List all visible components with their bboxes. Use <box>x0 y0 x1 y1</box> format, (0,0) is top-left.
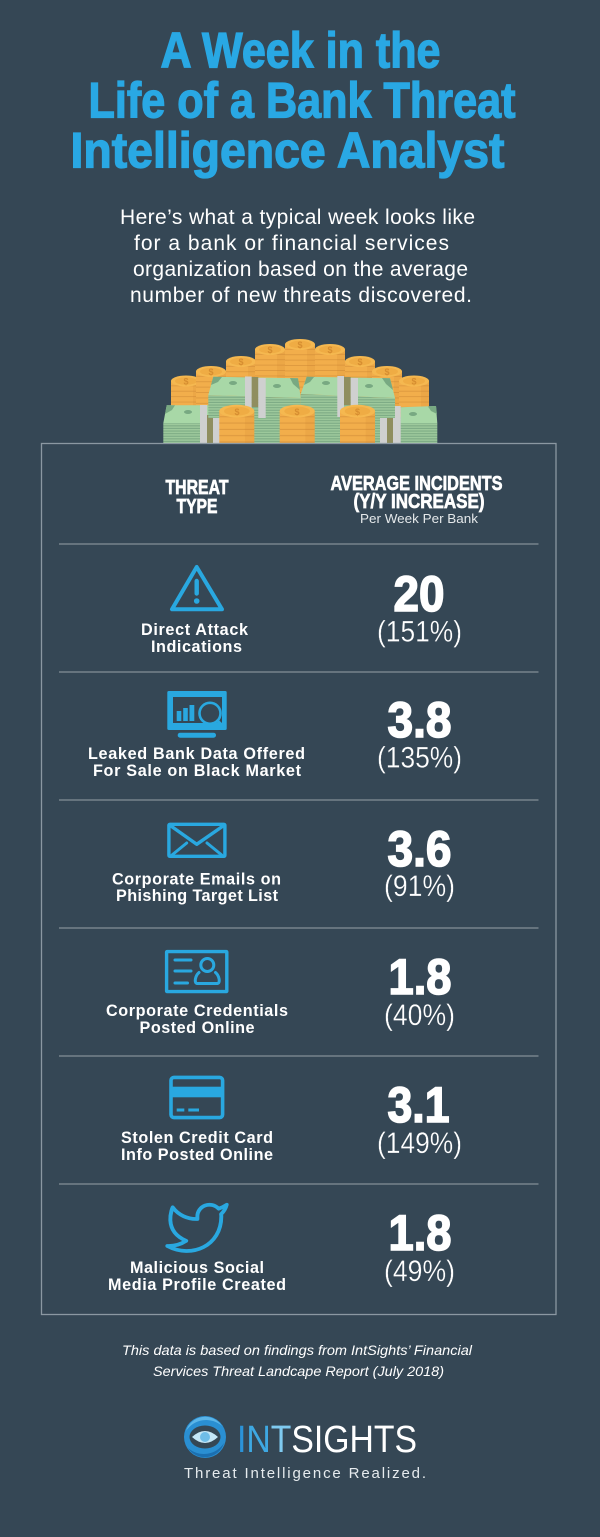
column header: average incidents <box>330 473 502 526</box>
intro text: number of new threats discovered. <box>130 284 472 307</box>
row: direct attack indications <box>141 566 462 656</box>
back row of coin stacks: $ <box>327 345 333 355</box>
icon: credit card <box>170 1077 224 1118</box>
label <box>112 870 281 905</box>
intro text: Here’s what a typical week looks like <box>120 206 475 229</box>
label: Corporate Credentials <box>106 1002 288 1020</box>
label: Phishing Target List <box>116 887 279 905</box>
label: Malicious Social <box>130 1259 264 1277</box>
back row of coin stacks: $ <box>208 367 214 377</box>
value <box>377 692 462 774</box>
illustration: stacks of coins and money <box>163 339 438 443</box>
back row of coin stacks: $ <box>267 345 273 355</box>
column header: threat type: THREAT <box>166 477 228 499</box>
value: (151%) <box>377 616 462 649</box>
label <box>141 621 249 656</box>
title: A Week in the <box>160 23 440 79</box>
column header: average incidents: Per Week Per Bank <box>360 511 479 526</box>
row: leaked bank data <box>88 691 462 780</box>
logo <box>184 1416 426 1482</box>
icon: monitor with magnifier <box>167 691 227 738</box>
intro text: for a bank or financial services <box>134 232 449 255</box>
intro text <box>120 206 475 307</box>
upper money bundles <box>208 376 395 418</box>
back row of coin stacks: $ <box>357 357 363 367</box>
label <box>88 745 305 780</box>
title <box>70 23 516 179</box>
value <box>384 949 455 1032</box>
front row of coin stacks: $ <box>355 407 360 417</box>
back row of coin stacks <box>171 339 429 417</box>
value: 1.8 <box>388 1205 452 1261</box>
icon: logo eye swirl <box>184 1416 226 1458</box>
row: malicious social media <box>108 1205 455 1294</box>
value: 3.8 <box>388 692 452 748</box>
label: Info Posted Online <box>121 1146 273 1164</box>
back row of coin stacks: $ <box>411 376 417 386</box>
back row of coin stacks: $ <box>297 340 303 350</box>
icon: twitter bird <box>167 1205 227 1251</box>
back row of coin stacks: $ <box>384 367 390 377</box>
label: For Sale on Black Market <box>93 762 302 780</box>
back row of coin stacks: $ <box>183 376 189 386</box>
back row of coin stacks: $ <box>238 357 244 367</box>
label: Posted Online <box>140 1019 254 1037</box>
column header: threat type: TYPE <box>176 496 218 518</box>
label: Indications <box>151 638 242 656</box>
label: Media Profile Created <box>108 1276 286 1294</box>
row: corporate credentials <box>106 949 455 1037</box>
value: (49%) <box>384 1255 455 1288</box>
value: (149%) <box>377 1127 462 1160</box>
row: corporate emails <box>112 821 455 905</box>
label: Stolen Credit Card <box>121 1129 273 1147</box>
table panel <box>42 444 556 1314</box>
label: Leaked Bank Data Offered <box>88 745 305 763</box>
source note <box>122 1342 473 1379</box>
value: (91%) <box>384 870 455 903</box>
front row of coin stacks: $ <box>234 407 240 417</box>
value: 3.1 <box>388 1077 450 1133</box>
value: 3.6 <box>388 821 452 877</box>
value: (135%) <box>377 742 462 774</box>
title: Intelligence Analyst <box>70 123 505 179</box>
icon: envelope <box>169 824 225 856</box>
column header: average incidents: AVERAGE INCIDENTS <box>330 473 502 495</box>
icon: warning triangle <box>172 567 222 609</box>
source note: This data is based on findings from IntSights’ Financial <box>122 1342 473 1358</box>
icon: id card <box>167 952 227 992</box>
wordmark: INTSIGHTS <box>237 1419 417 1461</box>
column header: average incidents: (Y/Y INCREASE) <box>354 491 484 513</box>
lower money bundles <box>163 405 437 443</box>
value <box>384 821 455 903</box>
value: (40%) <box>384 999 455 1032</box>
value <box>377 1077 462 1160</box>
value <box>377 566 462 649</box>
value <box>384 1205 455 1288</box>
label <box>108 1259 286 1294</box>
label: Corporate Emails on <box>112 870 281 888</box>
title: Life of a Bank Threat <box>88 73 516 129</box>
tagline: Threat Intelligence Realized. <box>184 1465 426 1482</box>
row: stolen credit card <box>121 1077 462 1164</box>
label <box>121 1129 273 1164</box>
value: 20 <box>394 566 444 622</box>
source note: Services Threat Landcape Report (July 2018) <box>153 1363 444 1379</box>
front row of coin stacks <box>219 404 375 443</box>
label: Direct Attack <box>141 621 249 639</box>
column header: threat type <box>166 477 228 518</box>
value: 1.8 <box>388 949 452 1005</box>
intro text: organization based on the average <box>133 258 468 281</box>
label <box>106 1002 288 1037</box>
front row of coin stacks: $ <box>294 407 300 417</box>
